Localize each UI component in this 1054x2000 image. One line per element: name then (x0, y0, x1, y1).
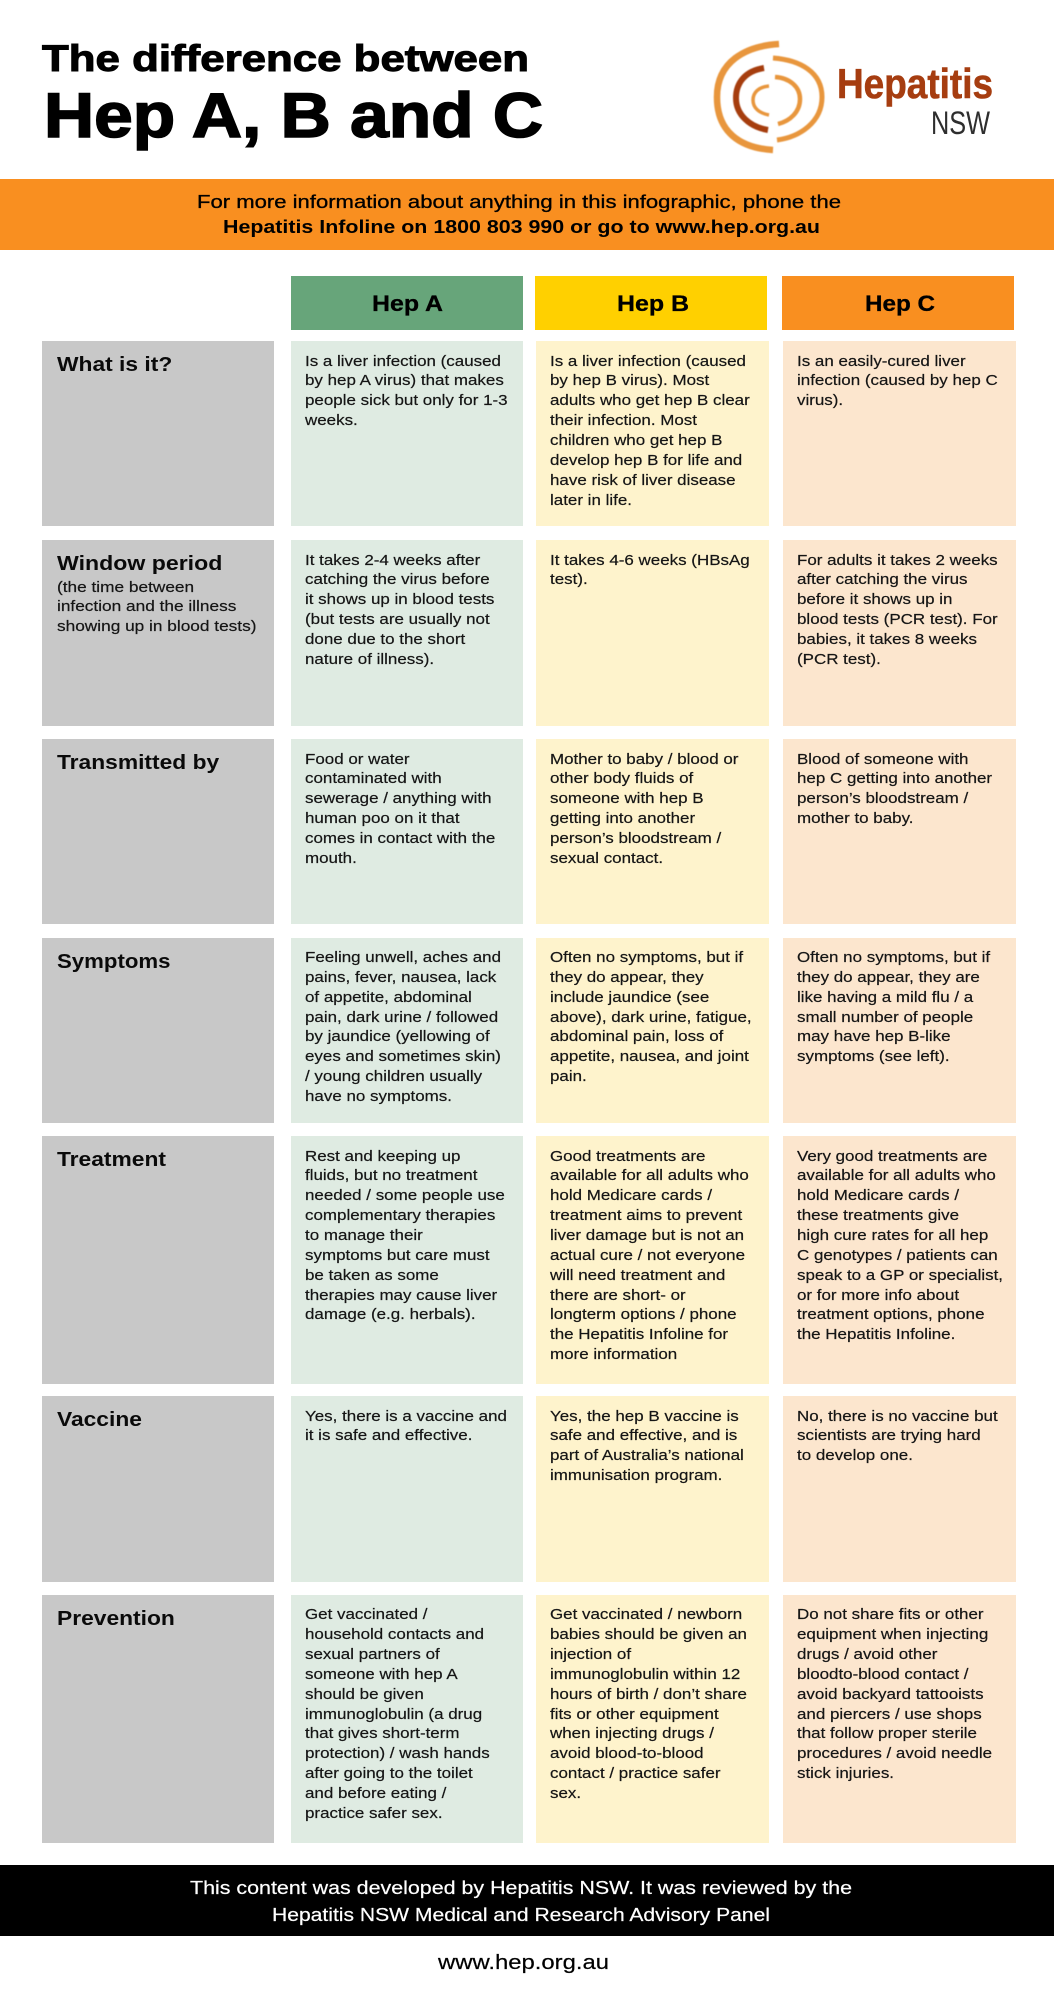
column header: Hep C: Hep C (865, 291, 935, 316)
cell: Hep B prevention: contact / practice safer (550, 1765, 721, 1782)
cell: Hep A treatment: complementary therapies (305, 1207, 495, 1224)
banner: Infoline contact: Hepatitis Infoline on 1800 803 990 or go to www.hep.org.au (223, 217, 820, 237)
cell: Hep B prevention: Get vaccinated / newborn (550, 1606, 742, 1623)
footer website: www.hep.org.au (437, 1952, 609, 1974)
cell: Hep B treatment: actual cure / not everyone (550, 1247, 745, 1264)
cell: Hep C window period: (PCR test). (797, 651, 881, 668)
column header: Hep A: Hep A (372, 291, 443, 316)
cell: Hep C treatment: available for all adults who (797, 1167, 996, 1184)
footer band: content credit: Hepatitis NSW Medical and Research Advisory Panel (272, 1905, 770, 1925)
cell: Hep A treatment: needed / some people use (305, 1187, 505, 1204)
cell: Hep B symptoms: above), dark urine, fatigue, (550, 1009, 752, 1026)
cell: Hep A what is it: Is a liver infection (caused (305, 353, 501, 370)
column header: Hep B: Hep B (617, 291, 689, 316)
cell: Hep C prevention: that follow proper sterile (797, 1725, 977, 1742)
cell: Hep A prevention: should be given (305, 1686, 424, 1703)
row: What is it? (42, 341, 1016, 526)
cell: Hep B treatment: longterm options / phone (550, 1306, 737, 1323)
cell: Hep A treatment (291, 1136, 523, 1384)
row heading: Treatment (42, 1136, 274, 1384)
row heading: Symptoms (42, 938, 274, 1123)
cell: Hep C treatment: hold Medicare cards / (797, 1187, 959, 1204)
cell: Hep A what is it: people sick but only for 1-3 (305, 392, 508, 409)
cell: Hep A window period: (but tests are usually not (305, 611, 490, 628)
cell: Hep C prevention: equipment when injecting (797, 1626, 988, 1643)
cell: Hep B prevention: sex. (550, 1785, 581, 1802)
cell: Hep C treatment: speak to a GP or specialist, (797, 1267, 1003, 1284)
cell: Hep A treatment: therapies may cause liver (305, 1286, 497, 1304)
cell: Hep B prevention: immunoglobulin within 12 (550, 1666, 740, 1683)
cell: Hep B transmission (536, 739, 769, 924)
cell: Hep C prevention: stick injuries. (797, 1765, 894, 1782)
cell: Hep B prevention: when injecting drugs / (550, 1725, 714, 1742)
cell: Hep B prevention: hours of birth / don’t share (550, 1686, 747, 1703)
cell: Hep B what is it: children who get hep B (550, 432, 722, 449)
cell: Hep B transmission: Mother to baby / blood or (550, 751, 738, 768)
cell: Hep A treatment: to manage their (305, 1227, 423, 1244)
cell: Hep C vaccine: scientists are trying hard (797, 1427, 981, 1444)
cell: Hep C window period: blood tests (PCR test). For (797, 611, 998, 628)
footer band: content credit (0, 1865, 1054, 1936)
cell: Hep C transmission (783, 739, 1016, 924)
cell: Hep A prevention: protection) / wash hands (305, 1745, 490, 1762)
cell: Hep A transmission: sewerage / anything with (305, 790, 492, 807)
icon: concentric broken circles (717, 44, 822, 150)
cell: Hep B what is it: have risk of liver disease (550, 472, 736, 489)
cell: Hep C symptoms: they do appear, they are (797, 969, 980, 986)
cell: Hep C symptoms (783, 938, 1016, 1123)
cell: Hep A vaccine (291, 1396, 523, 1582)
cell: Hep B transmission: someone with hep B (550, 790, 704, 807)
cell: Hep A symptoms (291, 938, 523, 1123)
cell: Hep B transmission: person’s bloodstream / (550, 830, 721, 847)
cell: Hep B prevention (536, 1595, 769, 1843)
row: Transmitted by (42, 739, 1016, 924)
cell: Hep B treatment: liver damage but is not an (550, 1227, 744, 1244)
cell: Hep C what is it (783, 341, 1016, 526)
cell: Hep C prevention: and piercers / use shops (797, 1706, 982, 1722)
row: Prevention (42, 1595, 1016, 1843)
cell: Hep A window period: catching the virus before (305, 571, 490, 588)
cell: Hep C vaccine: to develop one. (797, 1447, 913, 1464)
row heading: Transmitted by (42, 739, 274, 924)
row: Window period (42, 540, 1016, 726)
cell: Hep A prevention: household contacts and (305, 1626, 484, 1643)
cell: Hep A prevention: and before eating / (305, 1785, 446, 1802)
cell: Hep B vaccine: safe and effective, and is (550, 1427, 737, 1444)
title: The difference between (42, 38, 529, 79)
cell: Hep B symptoms (536, 938, 769, 1123)
row heading: Symptoms: Symptoms (57, 950, 170, 972)
cell: Hep C what is it: virus). (797, 392, 843, 409)
cell: Hep C window period: before it shows up in (797, 591, 952, 608)
row heading: Vaccine (42, 1396, 274, 1582)
cell: Hep B treatment: treatment aims to prevent (550, 1207, 742, 1224)
cell: Hep C prevention: procedures / avoid needle (797, 1745, 992, 1762)
cell: Hep C vaccine (783, 1396, 1016, 1582)
cell: Hep B what is it: adults who get hep B clear (550, 392, 750, 409)
cell: Hep A transmission: contaminated with (305, 770, 442, 787)
cell: Hep B symptoms: they do appear, they (550, 969, 704, 986)
cell: Hep B treatment: hold Medicare cards / (550, 1187, 712, 1204)
cell: Hep B window period: test). (550, 571, 588, 588)
column header: Hep B (535, 276, 767, 330)
cell: Hep B treatment: more information (550, 1346, 677, 1363)
row: Vaccine (42, 1396, 1016, 1582)
cell: Hep C prevention: drugs / avoid other (797, 1646, 937, 1663)
cell: Hep B what is it: Is a liver infection (caused (550, 353, 746, 370)
cell: Hep A treatment: damage (e.g. herbals). (305, 1306, 476, 1323)
cell: Hep C window period: after catching the virus (797, 571, 968, 588)
cell: Hep C transmission: hep C getting into another (797, 770, 992, 787)
logo wordmark: Hepatitis (837, 60, 993, 107)
cell: Hep B what is it: develop hep B for life and (550, 452, 742, 469)
cell: Hep C treatment: these treatments give (797, 1207, 959, 1224)
cell: Hep C symptoms: Often no symptoms, but if (797, 949, 990, 966)
cell: Hep C window period: babies, it takes 8 weeks (797, 631, 977, 648)
cell: Hep A window period: it shows up in blood tests (305, 591, 494, 608)
cell: Hep A symptoms: by jaundice (yellowing of (305, 1028, 490, 1045)
cell: Hep A prevention: practice safer sex. (305, 1805, 443, 1822)
row: Treatment (42, 1136, 1016, 1384)
column header: Hep A (291, 276, 523, 330)
cell: Hep A vaccine: it is safe and effective. (305, 1427, 472, 1444)
cell: Hep B treatment: the Hepatitis Infoline for (550, 1326, 728, 1343)
cell: Hep C treatment: treatment options, phone (797, 1306, 985, 1323)
cell: Hep A symptoms: have no symptoms. (305, 1088, 452, 1105)
title (42, 38, 543, 151)
row heading: Window period (42, 540, 274, 726)
cell: Hep C symptoms: like having a mild flu / a (797, 989, 973, 1006)
cell: Hep A prevention (291, 1595, 523, 1843)
title: Hep A, B and C (44, 81, 543, 151)
cell: Hep B transmission: other body fluids of (550, 770, 693, 787)
row heading: Transmitted by: Transmitted by (57, 752, 219, 774)
cell: Hep B prevention: fits or other equipment (550, 1706, 719, 1722)
cell: Hep B transmission: getting into another (550, 810, 695, 827)
cell: Hep C treatment: C genotypes / patients can (797, 1247, 998, 1264)
banner: Infoline contact: For more information about anything in this infographic, phone the (197, 192, 841, 212)
cell: Hep B vaccine: immunisation program. (550, 1467, 722, 1484)
cell: Hep A what is it: weeks. (305, 412, 358, 429)
cell: Hep A treatment: be taken as some (305, 1267, 439, 1284)
cell: Hep B treatment: will need treatment and (550, 1267, 725, 1284)
cell: Hep C treatment: the Hepatitis Infoline. (797, 1326, 955, 1343)
cell: Hep A window period (291, 540, 523, 726)
row heading: Window period: infection and the illness (57, 598, 236, 615)
cell: Hep A symptoms: of appetite, abdominal (305, 989, 472, 1006)
cell: Hep B symptoms: Often no symptoms, but if (550, 949, 743, 966)
cell: Hep C transmission: person’s bloodstream / (797, 790, 968, 807)
cell: Hep A transmission: human poo on it that (305, 810, 460, 827)
cell: Hep B symptoms: include jaundice (see (550, 989, 709, 1006)
cell: Hep B prevention: avoid blood-to-blood (550, 1745, 704, 1762)
cell: Hep A treatment: Rest and keeping up (305, 1148, 460, 1165)
cell: Hep B symptoms: abdominal pain, loss of (550, 1028, 723, 1045)
cell: Hep A window period: It takes 2-4 weeks after (305, 552, 480, 569)
cell: Hep A window period: nature of illness). (305, 651, 434, 668)
cell: Hep A transmission: mouth. (305, 850, 357, 867)
cell: Hep C transmission: mother to baby. (797, 810, 914, 827)
cell: Hep B symptoms: pain. (550, 1068, 587, 1085)
row heading: Vaccine: Vaccine (57, 1409, 142, 1431)
cell: Hep C treatment: or for more info about (797, 1286, 959, 1304)
cell: Hep C what is it: infection (caused by hep C (797, 372, 998, 389)
cell: Hep B vaccine: Yes, the hep B vaccine is (550, 1408, 739, 1425)
cell: Hep A window period: done due to the short (305, 631, 465, 648)
row: Symptoms (42, 938, 1016, 1123)
cell: Hep C what is it: Is an easily-cured liver (797, 353, 966, 370)
cell: Hep B symptoms: appetite, nausea, and joint (550, 1048, 749, 1065)
cell: Hep A treatment: fluids, but no treatment (305, 1167, 477, 1184)
cell: Hep A prevention: sexual partners of (305, 1646, 440, 1663)
cell: Hep A prevention: Get vaccinated / (305, 1606, 427, 1623)
banner: Infoline contact (0, 179, 1054, 250)
column header: Hep C (782, 276, 1014, 330)
cell: Hep A treatment: symptoms but care must (305, 1247, 490, 1264)
cell: Hep C transmission: Blood of someone with (797, 751, 968, 768)
cell: Hep A symptoms: pain, dark urine / followed (305, 1009, 498, 1026)
row heading: Window period: Window period (57, 553, 222, 575)
cell: Hep A symptoms: eyes and sometimes skin) (305, 1048, 501, 1065)
footer band: content credit: This content was developed by Hepatitis NSW. It was reviewed by the (190, 1878, 852, 1898)
cell: Hep A prevention: after going to the toilet (305, 1765, 473, 1782)
cell: Hep B transmission: sexual contact. (550, 850, 663, 867)
row heading: Window period: (the time between (57, 578, 194, 596)
cell: Hep B window period (536, 540, 769, 726)
row heading: What is it?: What is it? (57, 354, 172, 376)
cell: Hep A what is it: by hep A virus) that makes (305, 372, 504, 389)
cell: Hep B what is it: later in life. (550, 492, 632, 508)
cell: Hep C vaccine: No, there is no vaccine but (797, 1408, 998, 1425)
cell: Hep B vaccine (536, 1396, 769, 1582)
cell: Hep B what is it: their infection. Most (550, 412, 697, 429)
cell: Hep B treatment (536, 1136, 769, 1384)
cell: Hep C prevention (783, 1595, 1016, 1843)
cell: Hep C symptoms: symptoms (see left). (797, 1048, 950, 1065)
cell: Hep C treatment (783, 1136, 1016, 1384)
cell: Hep B vaccine: part of Australia’s national (550, 1447, 744, 1464)
row heading: Prevention (42, 1595, 274, 1843)
cell: Hep B treatment: Good treatments are (550, 1148, 705, 1165)
cell: Hep A symptoms: pains, fever, nausea, lack (305, 969, 496, 986)
cell: Hep A transmission (291, 739, 523, 924)
cell: Hep B what is it (536, 341, 769, 526)
logo: Hepatitis NSW (712, 40, 993, 154)
cell: Hep C prevention: bloodto-blood contact / (797, 1666, 969, 1683)
cell: Hep C window period (783, 540, 1016, 726)
cell: Hep B prevention: babies should be given an (550, 1626, 747, 1643)
row heading: Window period: showing up in blood tests) (57, 618, 256, 635)
cell: Hep C treatment: high cure rates for all hep (797, 1227, 988, 1244)
cell: Hep B window period: It takes 4-6 weeks (HBsAg (550, 552, 750, 569)
cell: Hep B treatment: there are short- or (550, 1286, 686, 1304)
cell: Hep A prevention: that gives short-term (305, 1725, 459, 1742)
cell: Hep B treatment: available for all adults who (550, 1167, 749, 1184)
cell: Hep A symptoms: Feeling unwell, aches and (305, 949, 501, 966)
row heading: What is it? (42, 341, 274, 526)
cell: Hep C prevention: avoid backyard tattooists (797, 1686, 984, 1703)
cell: Hep A vaccine: Yes, there is a vaccine and (305, 1408, 507, 1425)
cell: Hep C symptoms: small number of people (797, 1009, 973, 1026)
cell: Hep A prevention: immunoglobulin (a drug (305, 1706, 482, 1722)
cell: Hep C symptoms: may have hep B-like (797, 1028, 951, 1045)
cell: Hep A prevention: someone with hep A (305, 1666, 458, 1683)
cell: Hep A what is it (291, 341, 523, 526)
row heading: Prevention: Prevention (57, 1608, 175, 1630)
cell: Hep A transmission: Food or water (305, 751, 410, 768)
logo wordmark: NSW (931, 105, 991, 141)
cell: Hep C prevention: Do not share fits or other (797, 1606, 984, 1623)
cell: Hep C window period: For adults it takes 2 weeks (797, 552, 998, 569)
cell: Hep A transmission: comes in contact with the (305, 830, 495, 847)
cell: Hep A symptoms: / young children usually (305, 1068, 482, 1085)
cell: Hep B prevention: injection of (550, 1646, 631, 1663)
logo wordmark (837, 60, 993, 141)
row heading: Treatment: Treatment (57, 1149, 166, 1171)
cell: Hep C treatment: Very good treatments are (797, 1148, 987, 1165)
cell: Hep B what is it: by hep B virus). Most (550, 372, 709, 389)
